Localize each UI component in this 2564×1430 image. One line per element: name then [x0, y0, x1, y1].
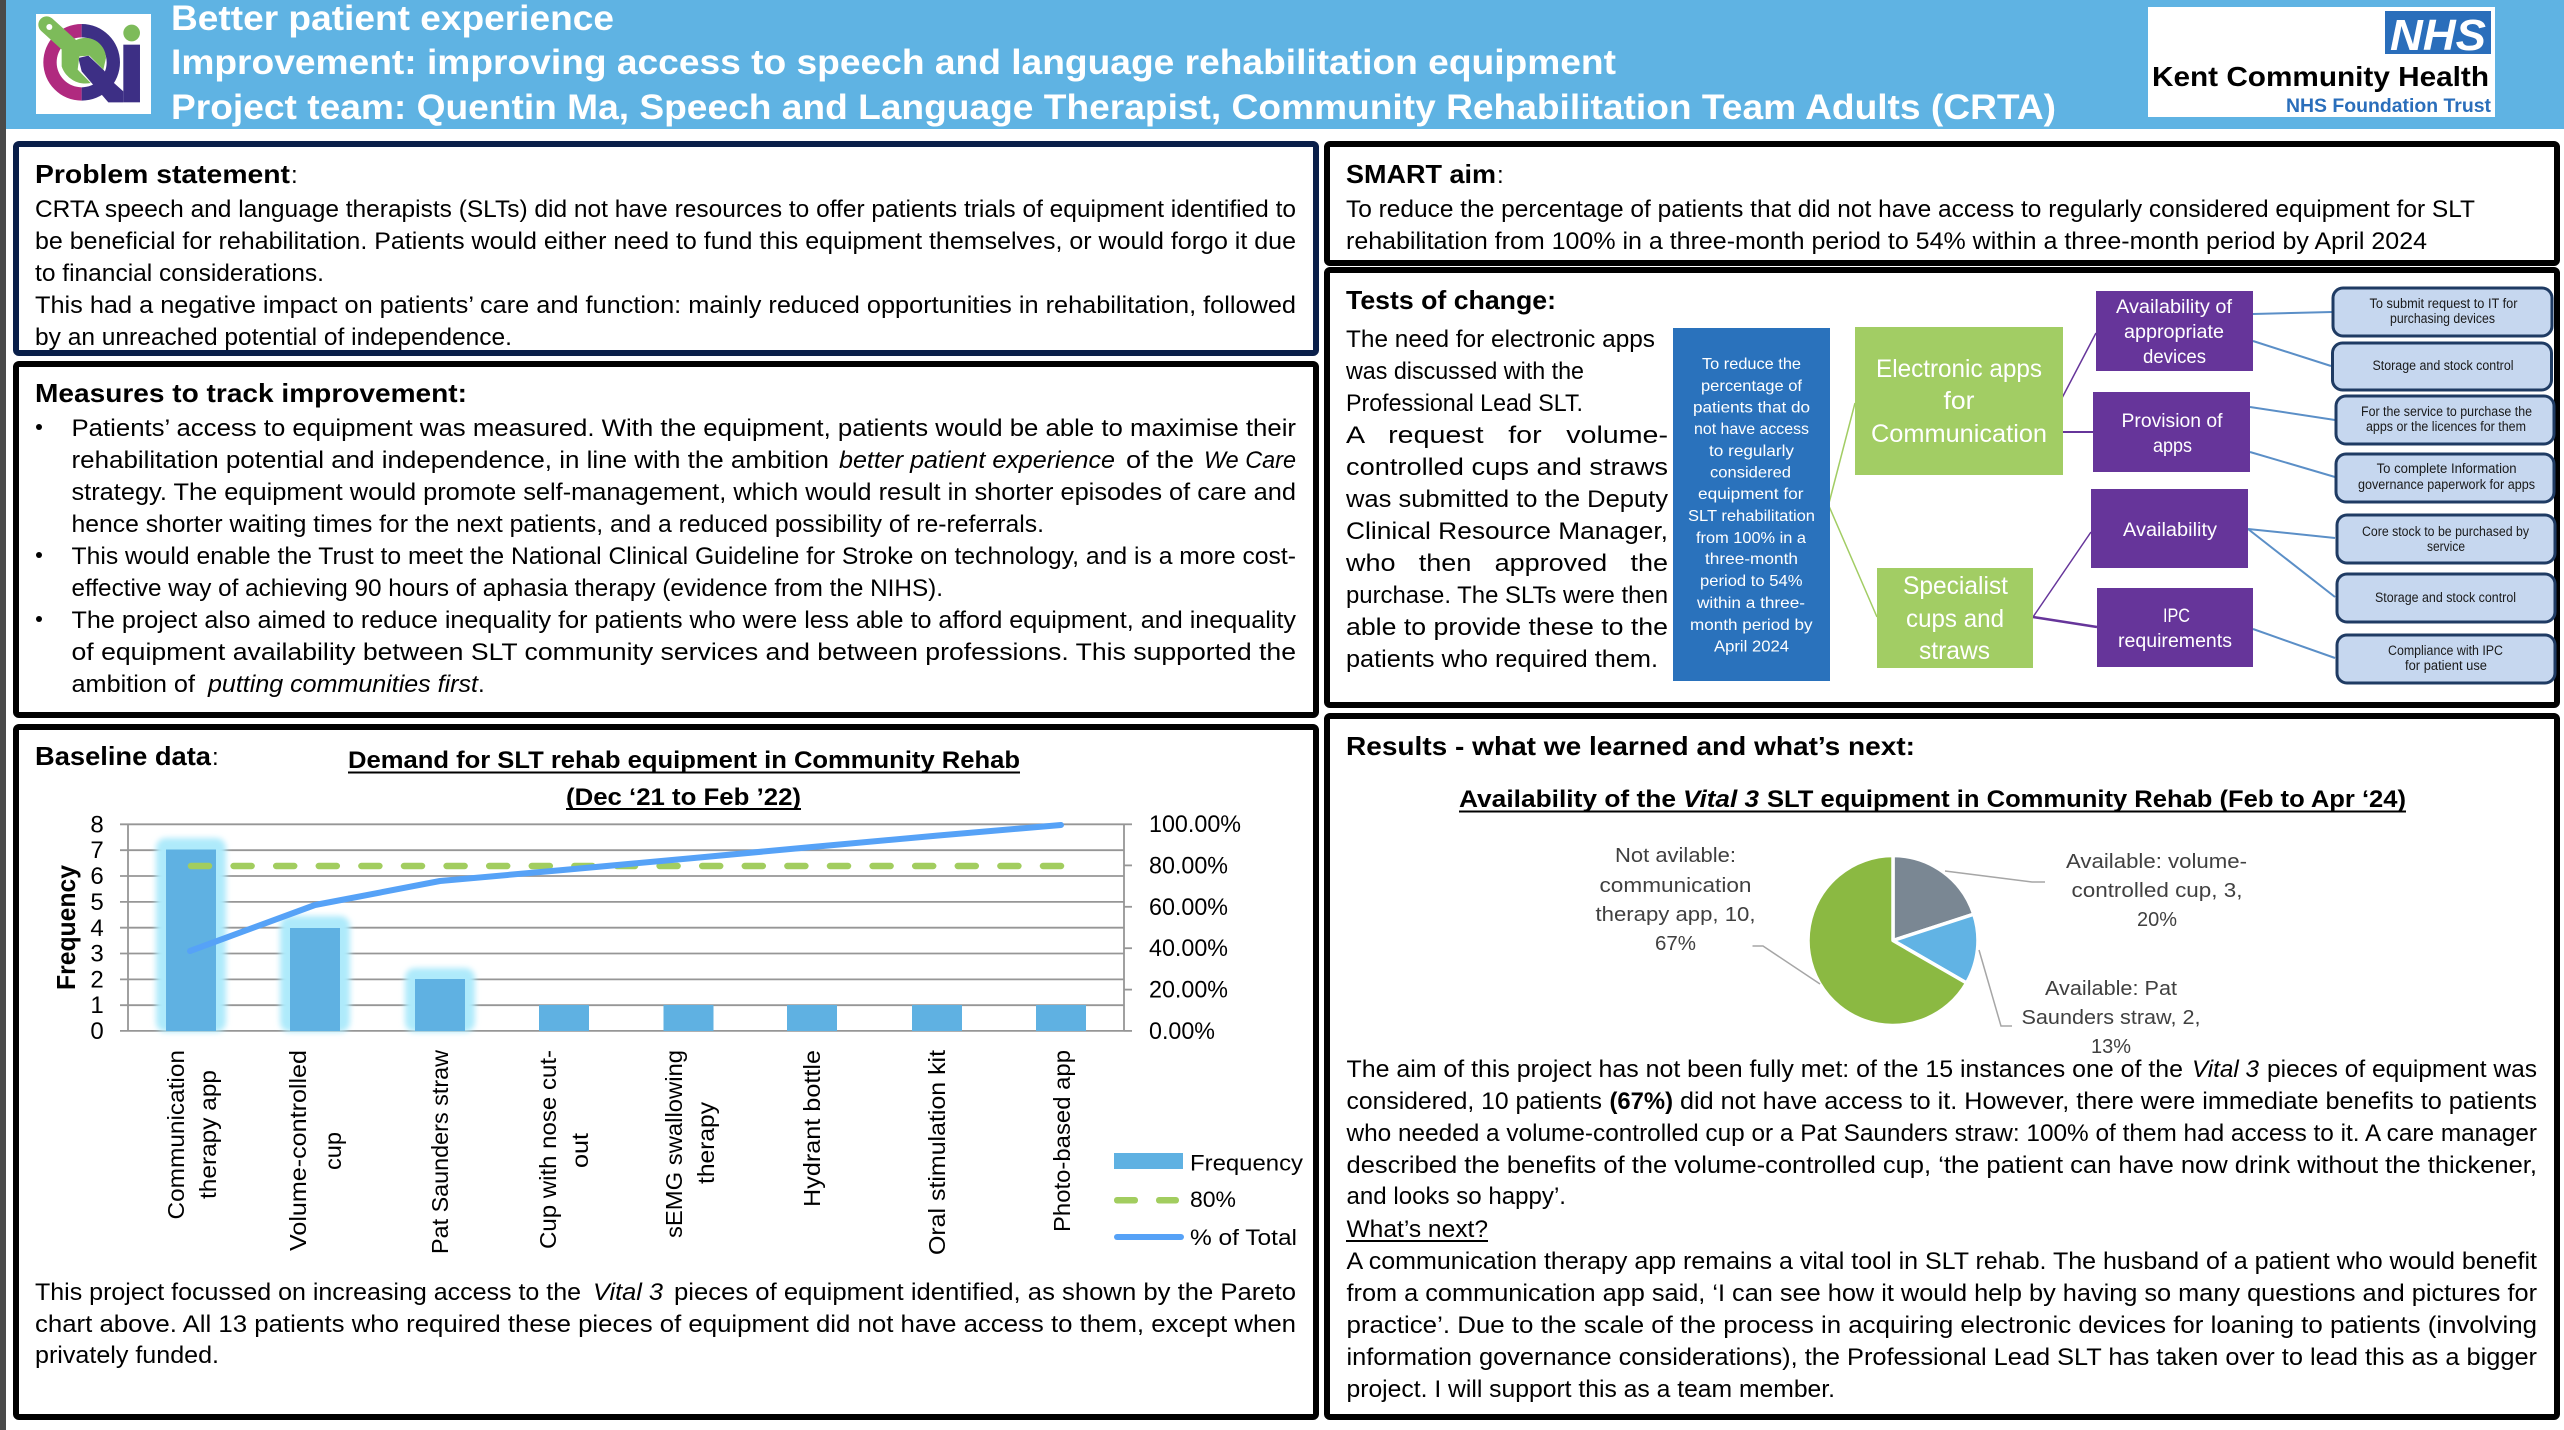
chart gridlines and axes — [120, 824, 1132, 1031]
secondary driver: appropriate devices: devices — [2143, 347, 2206, 368]
secondary driver: provision of apps: Provision of — [2122, 411, 2223, 432]
chart legend: Frequency — [1190, 1150, 1303, 1176]
left axis labels: 0 — [90, 1018, 104, 1045]
change idea: core stock: Core stock to be purchased by — [2362, 524, 2529, 539]
SMART aim text: To reduce the percentage of patients that did not have access to regularly considered equipment for SLT — [1346, 196, 2475, 223]
primary driver: electronic apps: Electronic apps — [1876, 355, 2042, 383]
80% threshold line — [191, 863, 1061, 869]
left axis labels: 6 — [90, 863, 104, 890]
panel: SMART aim — [1327, 144, 2557, 263]
aim box: patients that do — [1693, 400, 1810, 416]
tests of change text: able to provide these to the — [1346, 614, 1668, 641]
tests of change text: The need for electronic apps — [1346, 326, 1655, 353]
pie label: Pat Saunders straw: Saunders straw, 2, — [2022, 1007, 2200, 1029]
results paragraph: who needed a volume-controlled cup or a Pat Saunders straw: 100% of them had access to it. A care manager — [1345, 1120, 2537, 1147]
primary driver: cups and straws: Specialist — [1903, 572, 2008, 600]
pie label: Pat Saunders straw — [2022, 978, 2200, 1058]
primary driver: cups and straws — [1877, 568, 2033, 668]
aim box: equipment for — [1698, 486, 1804, 503]
secondary driver: provision of apps — [2093, 392, 2250, 472]
header banner — [6, 0, 2564, 129]
results paragraph: described the benefits of the volume-controlled cup, ‘the patient can have now drink without the thickener, — [1346, 1152, 2537, 1179]
aim box: three-month — [1705, 551, 1798, 568]
left axis labels — [90, 812, 104, 1045]
change idea: purchase apps: apps or the licences for them — [2366, 419, 2526, 434]
category labels: Communication — [163, 1050, 189, 1220]
left axis labels: 1 — [90, 992, 104, 1019]
left axis labels: 5 — [90, 889, 104, 916]
frequency bars — [166, 850, 1086, 1031]
change idea: storage and stock 2 — [2337, 574, 2555, 622]
change idea: IPC compliance: Compliance with IPC — [2388, 643, 2503, 658]
baseline paragraph: privately funded. — [35, 1342, 219, 1369]
pareto chart — [51, 811, 1303, 1255]
left axis labels: 8 — [90, 812, 104, 838]
pie chart — [1596, 845, 2247, 1058]
right axis labels: 20.00% — [1149, 977, 1228, 1004]
change idea: storage and stock 2: Storage and stock control — [2375, 590, 2516, 605]
heading: SMART aim: SMART aim — [1346, 159, 1496, 189]
right axis labels: 0.00% — [1149, 1018, 1215, 1045]
tests of change text: who then approved the — [1345, 550, 1668, 577]
baseline paragraph: chart above. All 13 patients who required these pieces of equipment did not have access to them, except when — [35, 1311, 1296, 1338]
right axis labels — [1149, 811, 1241, 1045]
right axis labels: 40.00% — [1149, 935, 1228, 962]
pie label: not available — [1596, 845, 1756, 955]
results paragraph: pieces of equipment was — [2267, 1056, 2537, 1083]
left axis labels: 7 — [90, 837, 104, 864]
pie label: volume-controlled cup: Available: volume- — [2066, 851, 2247, 873]
aim box: To reduce the — [1702, 356, 1801, 373]
results paragraph: considered, 10 patients — [1346, 1088, 1602, 1115]
pie label: not available: Not avilable: — [1615, 845, 1736, 867]
category labels: Oral stimulation kit — [924, 1049, 950, 1255]
primary driver: electronic apps: Communication — [1871, 420, 2047, 448]
heading: measures: Measures to track improvement: — [35, 378, 467, 408]
pie label: volume-controlled cup: 20% — [2137, 909, 2177, 931]
change idea: information governance: governance paperwork for apps — [2358, 477, 2535, 492]
panel: results — [1327, 716, 2557, 1417]
aim box: to regularly — [1709, 443, 1794, 460]
right axis labels: 60.00% — [1149, 894, 1228, 921]
chart title — [348, 747, 1020, 811]
connectors: purple to blue — [2248, 312, 2335, 658]
measures bullet list: The project also aimed to reduce inequality for patients who were less able to afford equipment, and inequality — [72, 607, 1296, 634]
title text: Better patient experience — [171, 0, 614, 38]
chart legend — [1114, 1150, 1303, 1250]
left axis labels: 3 — [90, 940, 104, 968]
panel: tests of change — [1327, 270, 2557, 705]
aim box: considered — [1710, 464, 1791, 482]
pie label: Pat Saunders straw: 13% — [2091, 1036, 2131, 1058]
secondary driver: availability: Availability — [2123, 520, 2218, 541]
aim box: percentage of — [1701, 378, 1803, 395]
category labels: therapy app — [195, 1070, 221, 1199]
results paragraph — [1345, 1056, 2537, 1210]
secondary driver: appropriate devices — [2096, 291, 2253, 371]
measures bullet list: We Care — [1204, 447, 1296, 474]
tests of change text: controlled cups and straws — [1346, 454, 1668, 481]
pie label: not available: 67% — [1655, 933, 1696, 955]
change idea: information governance: To complete Information — [2377, 461, 2517, 476]
pie leader lines — [1752, 871, 2045, 1026]
panel: measures to track improvement — [16, 364, 1316, 715]
connectors: blue to green — [1828, 403, 1877, 617]
heading: SMART aim: : — [1497, 162, 1504, 189]
measures bullet list: This would enable the Trust to meet the National Clinical Guideline for Stroke on technology, and is a more cost- — [72, 543, 1296, 570]
heading: results: Results - what we learned and what’s next: — [1346, 731, 1915, 761]
aim box: month period by — [1690, 617, 1812, 634]
change idea: IPC compliance: for patient use — [2405, 658, 2487, 673]
icon: NHS Kent Community Health logo — [2148, 7, 2495, 117]
panel: problem statement — [16, 144, 1316, 353]
category labels: Volume-controlled — [285, 1050, 311, 1251]
what's next paragraph: from a communication app said, ‘I can see how it would help by having so many questions and pictures for — [1346, 1280, 2537, 1307]
icon: QI logo — [36, 14, 151, 114]
pie chart title: Availability of the — [1459, 786, 1676, 813]
secondary driver: IPC requirements: IPC — [2163, 606, 2190, 627]
tests of change text — [1345, 326, 1668, 673]
results paragraph: Vital 3 — [2192, 1056, 2260, 1083]
baseline paragraph: pieces of equipment identified, as shown by the Pareto — [674, 1279, 1296, 1306]
measures bullet list: strategy. The equipment would promote self-management, which would result in shorter episodes of care and — [72, 479, 1296, 506]
measures bullet list — [36, 415, 1296, 698]
results paragraph: (67%) — [1610, 1088, 1673, 1115]
problem statement text: by an unreached potential of independence. — [35, 324, 512, 351]
SMART aim text: rehabilitation from 100% in a three-month period to 54% within a three-month period by April 2024 — [1346, 228, 2427, 255]
measures bullet list: ambition of — [72, 671, 195, 698]
left axis labels: 2 — [90, 966, 104, 994]
chart title: Demand for SLT rehab equipment in Community Rehab — [348, 747, 1020, 774]
icon: NHS Kent Community Health logo: Kent Community Health — [2152, 61, 2489, 92]
icon: NHS Kent Community Health logo: NHS Foundation Trust — [2286, 96, 2492, 117]
tests of change text: Professional Lead SLT. — [1346, 390, 1583, 417]
change idea: core stock — [2337, 515, 2555, 563]
change idea: core stock: service — [2427, 539, 2465, 554]
secondary driver: appropriate devices: Availability of — [2116, 297, 2233, 318]
aim box: April 2024 — [1714, 638, 1789, 656]
category labels: sEMG swallowing — [661, 1050, 687, 1238]
measures bullet list: of equipment availability between SLT community services and between professions. This supported the — [72, 639, 1296, 666]
y axis title: Frequency — [51, 865, 81, 990]
heading: baseline data: Baseline data — [35, 741, 212, 771]
left axis labels: 4 — [90, 915, 104, 942]
heading: problem statement: Problem statement — [35, 159, 290, 189]
category labels: Cup with nose cut- — [535, 1050, 561, 1249]
aim box: SLT rehabilitation — [1688, 508, 1815, 525]
title text: Project team: Quentin Ma, Speech and Language Therapist, Community Rehabilitation Team Adults (CRTA) — [171, 88, 2056, 127]
what's next paragraph — [1346, 1248, 2537, 1403]
category labels — [163, 1049, 1075, 1255]
cumulative % of total line — [190, 825, 1061, 951]
tests of change text: Clinical Resource Manager, — [1346, 518, 1668, 545]
aim box: period to 54% — [1700, 573, 1802, 590]
change idea: IPC compliance — [2337, 635, 2555, 683]
heading: tests of change: Tests of change: — [1346, 285, 1556, 315]
change idea: storage and stock — [2332, 343, 2552, 390]
tests of change text: was submitted to the Deputy — [1345, 486, 1668, 513]
pie chart title: SLT equipment in Community Rehab (Feb to Apr ‘24) — [1767, 786, 2406, 813]
secondary driver: IPC requirements — [2097, 588, 2253, 667]
icon: NHS Kent Community Health logo: NHS — [2390, 11, 2486, 60]
primary driver: electronic apps: for — [1944, 387, 1974, 415]
pie chart title: Vital 3 — [1683, 786, 1760, 813]
primary driver: electronic apps — [1855, 327, 2063, 475]
change idea: purchase apps — [2336, 396, 2554, 444]
problem statement text — [35, 196, 1296, 351]
connectors: green to purple — [2033, 333, 2097, 627]
category labels: Hydrant bottle — [799, 1050, 825, 1207]
secondary driver: provision of apps: apps — [2153, 436, 2192, 457]
secondary driver: availability — [2091, 489, 2248, 568]
pie label: Pat Saunders straw: Available: Pat — [2045, 978, 2177, 1000]
results paragraph: did not have access to it. However, there were immediate benefits to patients — [1680, 1088, 2537, 1115]
tests of change text: purchase. The SLTs were then — [1346, 582, 1668, 609]
problem statement text: This had a negative impact on patients’ care and function: mainly reduced opportunities in rehabilitation, followed — [35, 292, 1296, 319]
driver diagram — [1673, 288, 2555, 683]
baseline paragraph: Vital 3 — [593, 1279, 664, 1306]
problem statement text: to financial considerations. — [35, 260, 324, 287]
aim box: within a three- — [1696, 595, 1805, 612]
measures bullet list: . — [478, 671, 485, 698]
pie label: not available: communication — [1600, 875, 1752, 897]
measures bullet list: Patients’ access to equipment was measured. With the equipment, patients would be able to maximise their — [72, 415, 1296, 442]
secondary driver: IPC requirements: requirements — [2118, 631, 2232, 652]
measures bullet list: of the — [1126, 447, 1194, 474]
aim box: not have access — [1694, 421, 1809, 438]
measures bullet list: hence shorter waiting times for the next patients, and a reduced possibility of re-referrals. — [72, 511, 1044, 538]
change idea: request to IT: To submit request to IT for — [2370, 296, 2518, 311]
what's next paragraph: practice’. Due to the scale of the process in acquiring electronic devices for loaning to patients (involving — [1346, 1312, 2537, 1339]
what's next paragraph: A communication therapy app remains a vital tool in SLT rehab. The husband of a patient who would benefit — [1346, 1248, 2537, 1275]
secondary driver: appropriate devices: appropriate — [2124, 322, 2224, 343]
results paragraph: The aim of this project has not been fully met: of the 15 instances one of the — [1346, 1056, 2183, 1083]
results paragraph: and looks so happy’. — [1346, 1183, 1566, 1210]
pie chart title — [1459, 786, 2406, 813]
tests of change text: was discussed with the — [1345, 358, 1584, 385]
title text — [171, 0, 2056, 127]
right axis labels: 100.00% — [1149, 811, 1241, 838]
change idea: request to IT: purchasing devices — [2390, 311, 2495, 326]
measures bullet list: putting communities first — [207, 671, 479, 698]
chart legend: 80% — [1190, 1187, 1236, 1212]
primary driver: cups and straws: cups and — [1906, 605, 2004, 633]
what's next paragraph: project. I will support this as a team member. — [1346, 1376, 1835, 1403]
title text: Improvement: improving access to speech and language rehabilitation equipment — [171, 43, 1616, 82]
heading: baseline data: : — [212, 744, 219, 771]
aim box — [1673, 328, 1830, 681]
pie slices — [1808, 856, 1978, 1026]
right axis labels: 80.00% — [1149, 852, 1228, 879]
change idea: request to IT — [2333, 288, 2552, 336]
problem statement text: CRTA speech and language therapists (SLTs) did not have resources to offer patients trials of equipment identified to — [35, 196, 1296, 223]
measures bullet list: rehabilitation potential and independence, in line with the ambition — [72, 447, 829, 474]
baseline paragraph — [35, 1279, 1296, 1369]
chart title: (Dec ‘21 to Feb ’22) — [566, 784, 801, 811]
category labels: out — [567, 1132, 593, 1168]
what's next paragraph: information governance considerations), the Professional Lead SLT has taken over to lead this as a bigger — [1346, 1344, 2537, 1371]
tests of change text: A request for volume- — [1346, 422, 1668, 449]
change idea: storage and stock: Storage and stock control — [2372, 358, 2514, 373]
problem statement text: be beneficial for rehabilitation. Patients would either need to fund this equipment themselves, or would forgo it due — [35, 228, 1296, 255]
category labels: therapy — [693, 1101, 719, 1184]
category labels: cup — [320, 1132, 346, 1170]
baseline paragraph: This project focussed on increasing access to the — [35, 1279, 581, 1306]
aim box: from 100% in a — [1696, 530, 1806, 547]
measures bullet list: effective way of achieving 90 hours of aphasia therapy (evidence from the NIHS). — [72, 575, 943, 602]
pie label: volume-controlled cup: controlled cup, 3, — [2072, 880, 2242, 902]
category labels: Pat Saunders straw — [427, 1050, 453, 1254]
pie label: not available: therapy app, 10, — [1596, 904, 1756, 926]
chart legend: % of Total — [1190, 1225, 1297, 1250]
what's next heading: What’s next? — [1346, 1216, 1488, 1243]
primary driver: cups and straws: straws — [1919, 637, 1990, 665]
panel: baseline data — [16, 727, 1316, 1417]
SMART aim text — [1346, 196, 2475, 255]
pie label: volume-controlled cup — [2066, 851, 2247, 931]
change idea: information governance — [2336, 454, 2554, 502]
change idea: purchase apps: For the service to purchase the — [2361, 404, 2532, 419]
measures bullet list: better patient experience — [839, 447, 1115, 474]
category labels: Photo-based app — [1049, 1050, 1075, 1232]
heading: problem statement: : — [291, 162, 298, 189]
bar glow — [156, 838, 475, 1032]
tests of change text: patients who required them. — [1346, 646, 1658, 673]
